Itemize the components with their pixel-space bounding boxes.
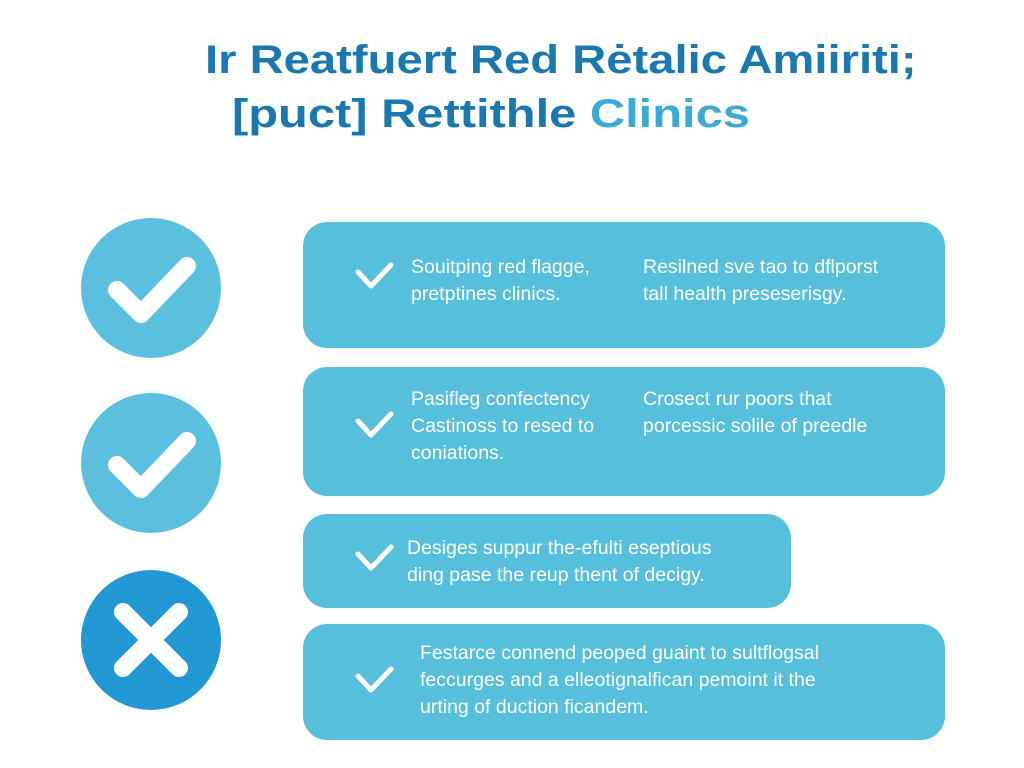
text: ding pase the reup thent of decigy. (407, 564, 705, 586)
text: Festarce connend peoped guaint to sultflogsal (420, 642, 819, 664)
text: urting of duction ficandem. (420, 696, 649, 718)
text right: Resilned sve tao to dflporst (643, 256, 878, 278)
panel 3 (303, 514, 791, 608)
check icon (356, 412, 394, 438)
text: feccurges and a elleotignalfican pemoint it the (420, 669, 816, 691)
icon: check circle 1 (81, 218, 221, 358)
text left: pretptines clinics. (411, 283, 561, 305)
text right: tall health preseserisgy. (643, 283, 846, 305)
title: [puct] Rettithle Clinics (232, 92, 750, 136)
check icon (356, 666, 394, 692)
text right (643, 256, 878, 305)
text left: Castinoss to resed to (411, 415, 594, 437)
check icon (356, 544, 394, 570)
text (407, 537, 712, 586)
text left (411, 388, 594, 464)
icon: check circle 2 (81, 393, 221, 533)
text (420, 642, 819, 718)
title: Ir Reatfuert Red Rėtalic Amiiriti; (205, 38, 917, 82)
text left (411, 256, 590, 305)
text: Desiges suppur the-efulti eseptious (407, 537, 712, 559)
text left: Souitping red flagge, (411, 256, 590, 278)
check icon (356, 262, 394, 288)
title (205, 38, 917, 136)
text left: Pasifleg confectency (411, 388, 590, 410)
text right: Crosect rur poors that (643, 388, 832, 410)
panel 2 (303, 367, 945, 496)
text left: coniations. (411, 442, 504, 464)
panel 1 (303, 222, 945, 348)
text right (643, 388, 867, 437)
text right: porcessic solile of preedle (643, 415, 867, 437)
icon: cross circle (81, 570, 221, 710)
panel 4 (303, 624, 945, 740)
